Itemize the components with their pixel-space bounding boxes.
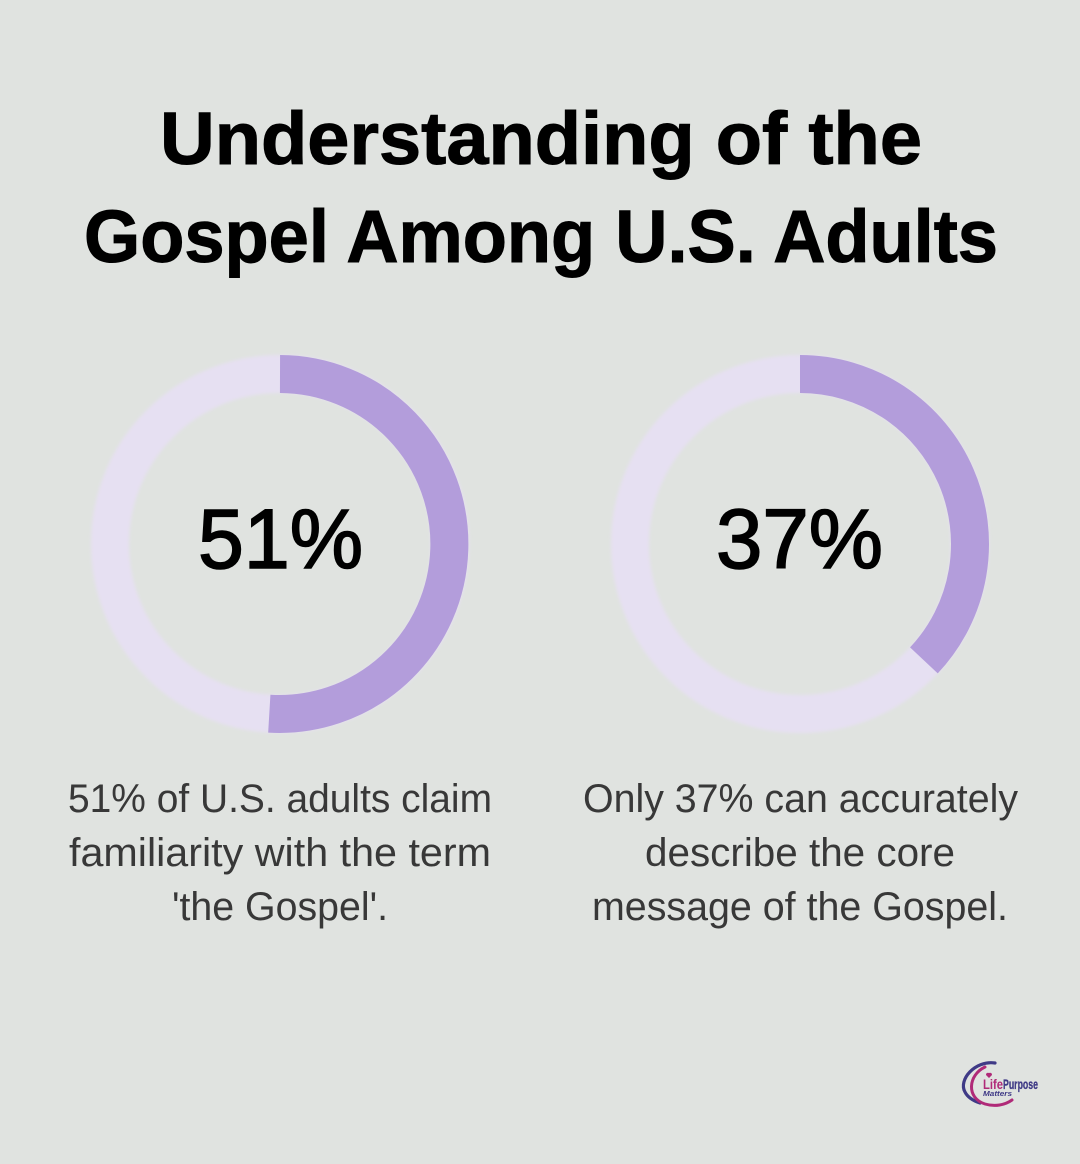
- logo: Life Purpose Matters: [963, 1063, 1038, 1105]
- description: 37%: [583, 777, 1018, 929]
- description: 51%: [68, 777, 492, 929]
- logo wordmark: Matters: [983, 1091, 1012, 1098]
- donut chart: 37%: [630, 374, 970, 714]
- title: Understanding of the: [160, 97, 922, 180]
- logo wordmark: [983, 1076, 1038, 1098]
- panel: 37% can describe the message: [583, 374, 1018, 929]
- description: 37%: describe the core: [645, 831, 955, 875]
- description: 51%: 51% of U.S. adults claim: [68, 777, 492, 821]
- description: 51%: familiarity with the term: [69, 831, 491, 875]
- logo wordmark: Purpose: [1003, 1076, 1038, 1092]
- title: Gospel Among U.S. Adults: [84, 195, 998, 278]
- icon: logo arcs: [963, 1063, 1012, 1105]
- logo wordmark: Life: [983, 1076, 1003, 1092]
- stat: 51%: 51%: [198, 492, 363, 586]
- stat: 37%: 37%: [716, 492, 883, 586]
- description: 51%: 'the Gospel'.: [172, 885, 388, 929]
- description: 37%: message of the Gospel.: [592, 885, 1008, 929]
- title: [84, 97, 998, 278]
- description: 37%: Only 37% can accurately: [583, 777, 1018, 821]
- panel: 51% familiar with the term: [68, 374, 492, 929]
- donut chart: 51%: [110, 374, 450, 714]
